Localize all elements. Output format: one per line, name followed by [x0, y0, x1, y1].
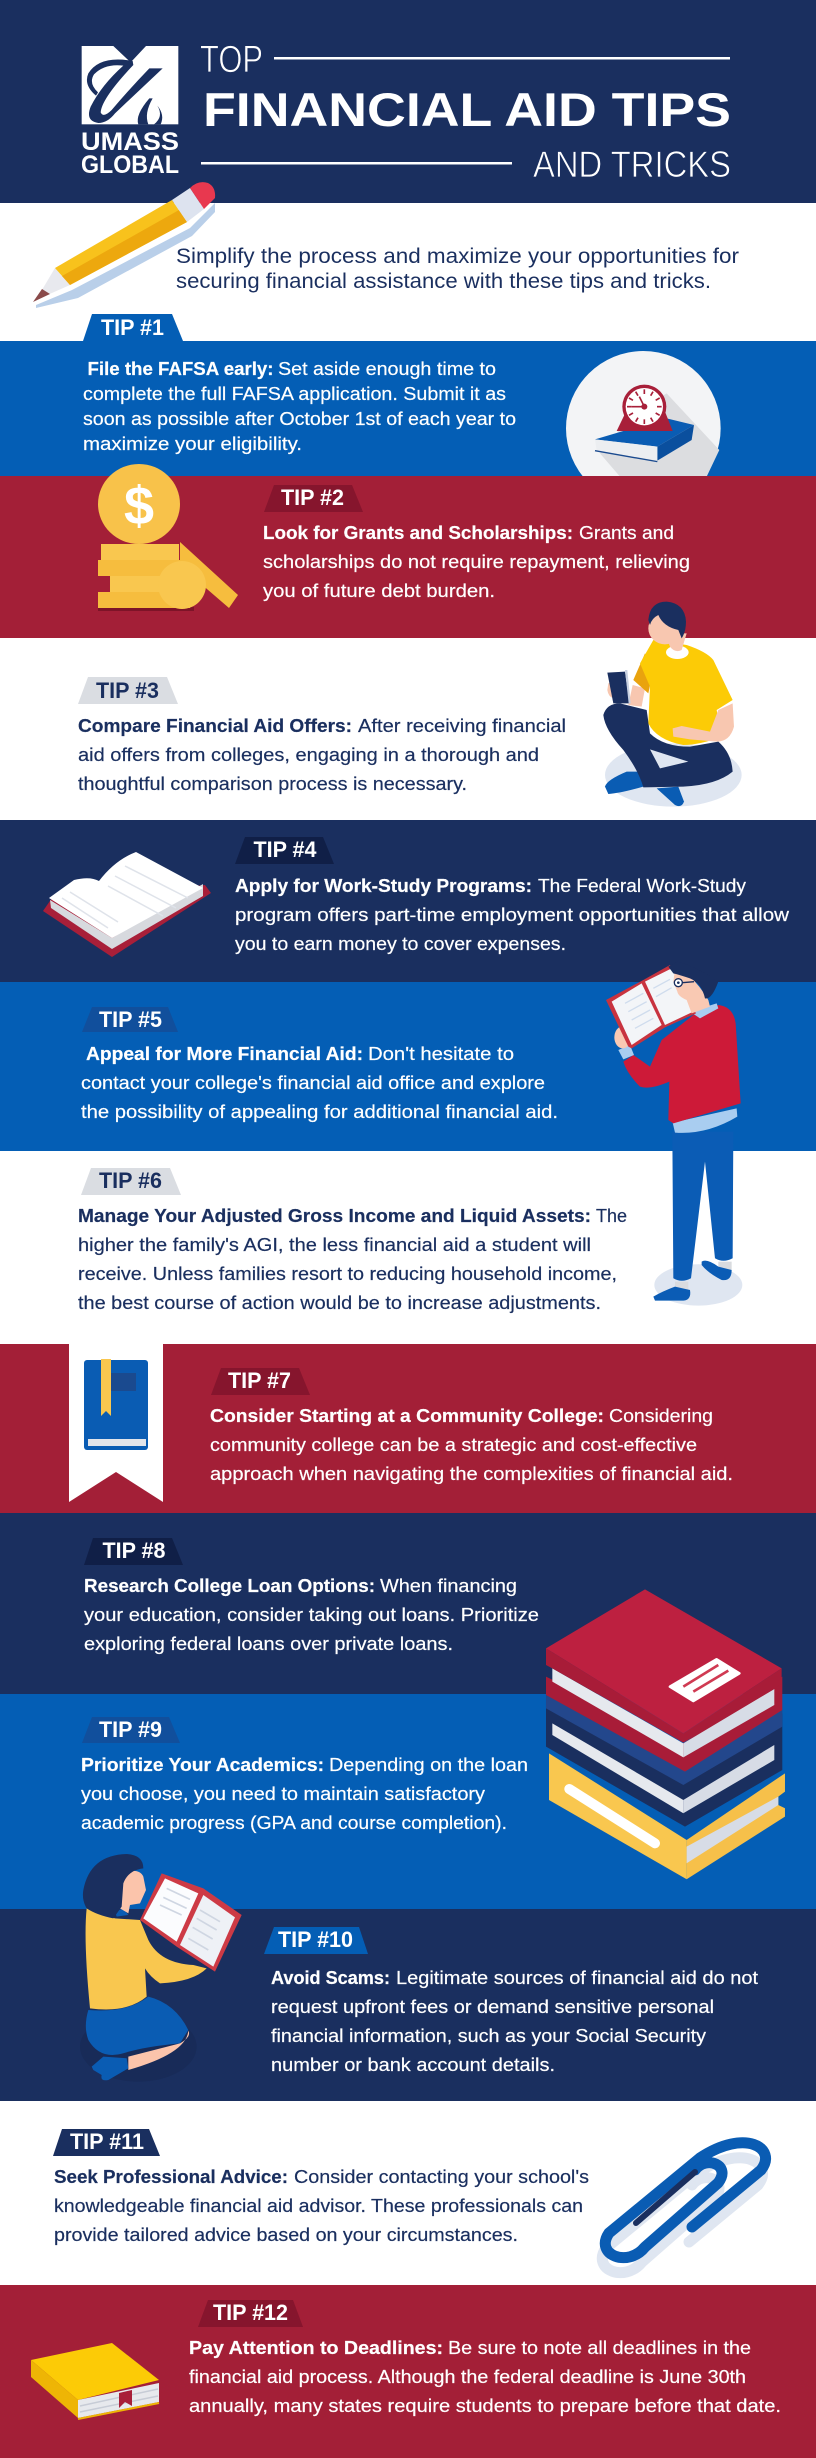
- text: tip 5: Appeal for More Financial Aid:: [86, 1043, 363, 1064]
- text: tip 9: Depending on the loan: [329, 1754, 528, 1775]
- badge: tip 5: TIP #5: [99, 1007, 162, 1032]
- icon: gold coins: [98, 464, 238, 611]
- text: tip 3: thoughtful comparison process is necessary.: [78, 773, 467, 794]
- text: tip 8: your education, consider taking out loans. Prioritize: [84, 1604, 539, 1625]
- text: tip 3: [78, 715, 566, 794]
- badge: tip 12: [198, 2300, 303, 2327]
- panel: tip 4: [0, 820, 816, 982]
- text: tip 6: the best course of action would be to increase adjustments.: [78, 1292, 601, 1313]
- ribbon bookmark with book icon: [69, 1344, 163, 1502]
- text: tip 5: the possibility of appealing for additional financial aid.: [81, 1101, 558, 1122]
- icon: yellow closed book: [31, 2343, 159, 2419]
- badge: tip 9: TIP #9: [99, 1717, 162, 1742]
- text: tip 1: soon as possible after October 1st of each year to: [83, 408, 516, 429]
- text: tip 7: Consider Starting at a Community College:: [210, 1405, 604, 1426]
- text: tip 1: Set aside enough time to: [278, 358, 496, 379]
- text: tip 1: complete the full FAFSA application. Submit it as: [83, 383, 506, 404]
- icon: paperclip: [602, 2143, 766, 2273]
- text: tip 4: you to earn money to cover expenses.: [235, 933, 566, 954]
- badge: tip 7: [211, 1368, 310, 1395]
- panel: tip 2: [0, 464, 816, 638]
- badge: tip 8: TIP #8: [102, 1538, 166, 1563]
- badge: tip 8: [84, 1538, 183, 1565]
- badge: tip 3: [78, 677, 178, 704]
- text: tip 9: you choose, you need to maintain satisfactory: [81, 1783, 486, 1804]
- text: tip 2: you of future debt burden.: [263, 580, 495, 601]
- text: tip 5: Don't hesitate to: [368, 1043, 514, 1064]
- text: tip 10: request upfront fees or demand sensitive personal: [271, 1996, 714, 2017]
- text: tip 6: higher the family's AGI, the less financial aid a student will: [78, 1234, 591, 1255]
- text: tip 1: File the FAFSA early:: [88, 358, 274, 379]
- badge: tip 6: [81, 1168, 181, 1195]
- badge: tip 12: TIP #12: [213, 2300, 288, 2325]
- text: tip 6: [78, 1205, 627, 1313]
- panel: tip 8: [0, 1513, 816, 1694]
- panel: tip 1: [0, 314, 816, 506]
- text: tip 7: approach when navigating the complexities of financial aid.: [210, 1463, 733, 1484]
- text: tip 6: The: [596, 1205, 627, 1226]
- text: tip 4: [235, 875, 790, 954]
- panel: tip 9: [0, 1694, 816, 1909]
- badge: tip 2: [264, 485, 363, 512]
- text: tip 3: After receiving financial: [358, 715, 566, 736]
- text: tip 2: [263, 522, 690, 601]
- panel: tip 3: [0, 602, 816, 820]
- text: tip 11: Seek Professional Advice:: [54, 2166, 288, 2187]
- icon: open book: [43, 852, 211, 957]
- badge: tip 1: [83, 314, 183, 341]
- badge: tip 7: TIP #7: [228, 1368, 291, 1393]
- text: tip 10: Legitimate sources of financial aid do not: [396, 1967, 758, 1988]
- text: tip 12: financial aid process. Although the federal deadline is June 30th: [189, 2366, 746, 2387]
- badge: tip 2: TIP #2: [281, 485, 344, 510]
- title: top: TOP: [200, 39, 263, 81]
- text: tip 3: aid offers from colleges, engaging in a thorough and: [78, 744, 539, 765]
- badge: tip 11: TIP #11: [70, 2129, 144, 2154]
- text: tip 3: Compare Financial Aid Offers:: [78, 715, 352, 736]
- illustration: man sitting with phone: [603, 602, 742, 807]
- text: tip 8: exploring federal loans over private loans.: [84, 1633, 453, 1654]
- text: tip 4: Apply for Work-Study Programs:: [235, 875, 532, 896]
- intro text: [176, 244, 739, 293]
- text: tip 12: [189, 2337, 781, 2416]
- text: tip 12: Be sure to note all deadlines in the: [448, 2337, 751, 2358]
- text: tip 11: provide tailored advice based on your circumstances.: [54, 2224, 518, 2245]
- text: tip 12: annually, many states require students to prepare before that date.: [189, 2395, 781, 2416]
- text: tip 1: maximize your eligibility.: [83, 433, 302, 454]
- text: tip 7: [210, 1405, 733, 1484]
- badge: tip 1: TIP #1: [101, 315, 164, 340]
- illustration: woman kneeling reading book: [80, 1854, 242, 2082]
- illustration: man standing reading book: [606, 962, 742, 1306]
- badge: tip 9: [82, 1717, 180, 1743]
- panel: header: [0, 0, 816, 203]
- text: tip 11: [54, 2166, 589, 2245]
- text: tip 9: Prioritize Your Academics:: [81, 1754, 324, 1775]
- text: tip 8: [84, 1575, 539, 1654]
- text: tip 1: [83, 358, 516, 454]
- badge: tip 10: [264, 1927, 368, 1954]
- text: tip 6: receive. Unless families resort to reducing household income,: [78, 1263, 617, 1284]
- text: tip 2: scholarships do not require repayment, relieving: [263, 551, 690, 572]
- badge: tip 11: [53, 2129, 160, 2156]
- title: and tricks: AND TRICKS: [533, 144, 731, 185]
- logo: UMass Global: [81, 46, 179, 179]
- text: tip 7: community college can be a strategic and cost-effective: [210, 1434, 697, 1455]
- icon: gold coins: $: [124, 476, 154, 536]
- badge: tip 6: TIP #6: [99, 1168, 162, 1193]
- text: tip 7: Considering: [609, 1405, 713, 1426]
- text: tip 2: Grants and: [579, 522, 674, 543]
- text: tip 9: academic progress (GPA and course completion).: [81, 1812, 507, 1833]
- badge: tip 3: TIP #3: [96, 678, 159, 703]
- badge: tip 5: [82, 1007, 178, 1032]
- intro text: securing financial assistance with these tips and tricks.: [176, 269, 711, 293]
- panel: tip 7: [0, 1344, 816, 1513]
- text: tip 12: Pay Attention to Deadlines:: [189, 2337, 443, 2358]
- icon: pencil: [33, 182, 215, 308]
- illustration: stack of books: [546, 1589, 785, 1879]
- panel: tip 11: [0, 2101, 816, 2285]
- panel: tip 10: [0, 1854, 816, 2101]
- text: tip 10: number or bank account details.: [271, 2054, 555, 2075]
- logo: UMass Global: GLOBAL: [81, 151, 179, 179]
- text: tip 4: program offers part-time employment opportunities that allow: [235, 904, 790, 925]
- panel: tip 5: [0, 982, 816, 1151]
- text: tip 6: Manage Your Adjusted Gross Income and Liquid Assets:: [78, 1205, 591, 1226]
- text: tip 5: contact your college's financial aid office and explore: [81, 1072, 545, 1093]
- text: tip 8: When financing: [380, 1575, 517, 1596]
- text: tip 5: [81, 1043, 558, 1122]
- text: tip 10: financial information, such as your Social Security: [271, 2025, 707, 2046]
- icon: clock on book: [566, 351, 721, 506]
- text: tip 8: Research College Loan Options:: [84, 1575, 375, 1596]
- text: tip 4: The Federal Work-Study: [538, 875, 747, 896]
- logo: UMass Global: UMASS: [81, 128, 179, 156]
- intro text: Simplify the process and maximize your opportunities for: [176, 244, 739, 268]
- title: financial aid tips: FINANCIAL AID TIPS: [203, 83, 731, 136]
- panel: tip 6: [0, 1151, 816, 1344]
- text: tip 2: Look for Grants and Scholarships:: [263, 522, 573, 543]
- text: tip 9: [81, 1754, 528, 1833]
- badge: tip 4: [235, 837, 334, 864]
- text: tip 10: Avoid Scams:: [271, 1967, 390, 1988]
- text: tip 11: knowledgeable financial aid advisor. These professionals can: [54, 2195, 583, 2216]
- panel: tip 12: [0, 2285, 816, 2458]
- text: tip 11: Consider contacting your school's: [294, 2166, 589, 2187]
- badge: tip 10: TIP #10: [278, 1927, 353, 1952]
- text: tip 10: [271, 1967, 758, 2075]
- badge: tip 4: TIP #4: [254, 837, 317, 862]
